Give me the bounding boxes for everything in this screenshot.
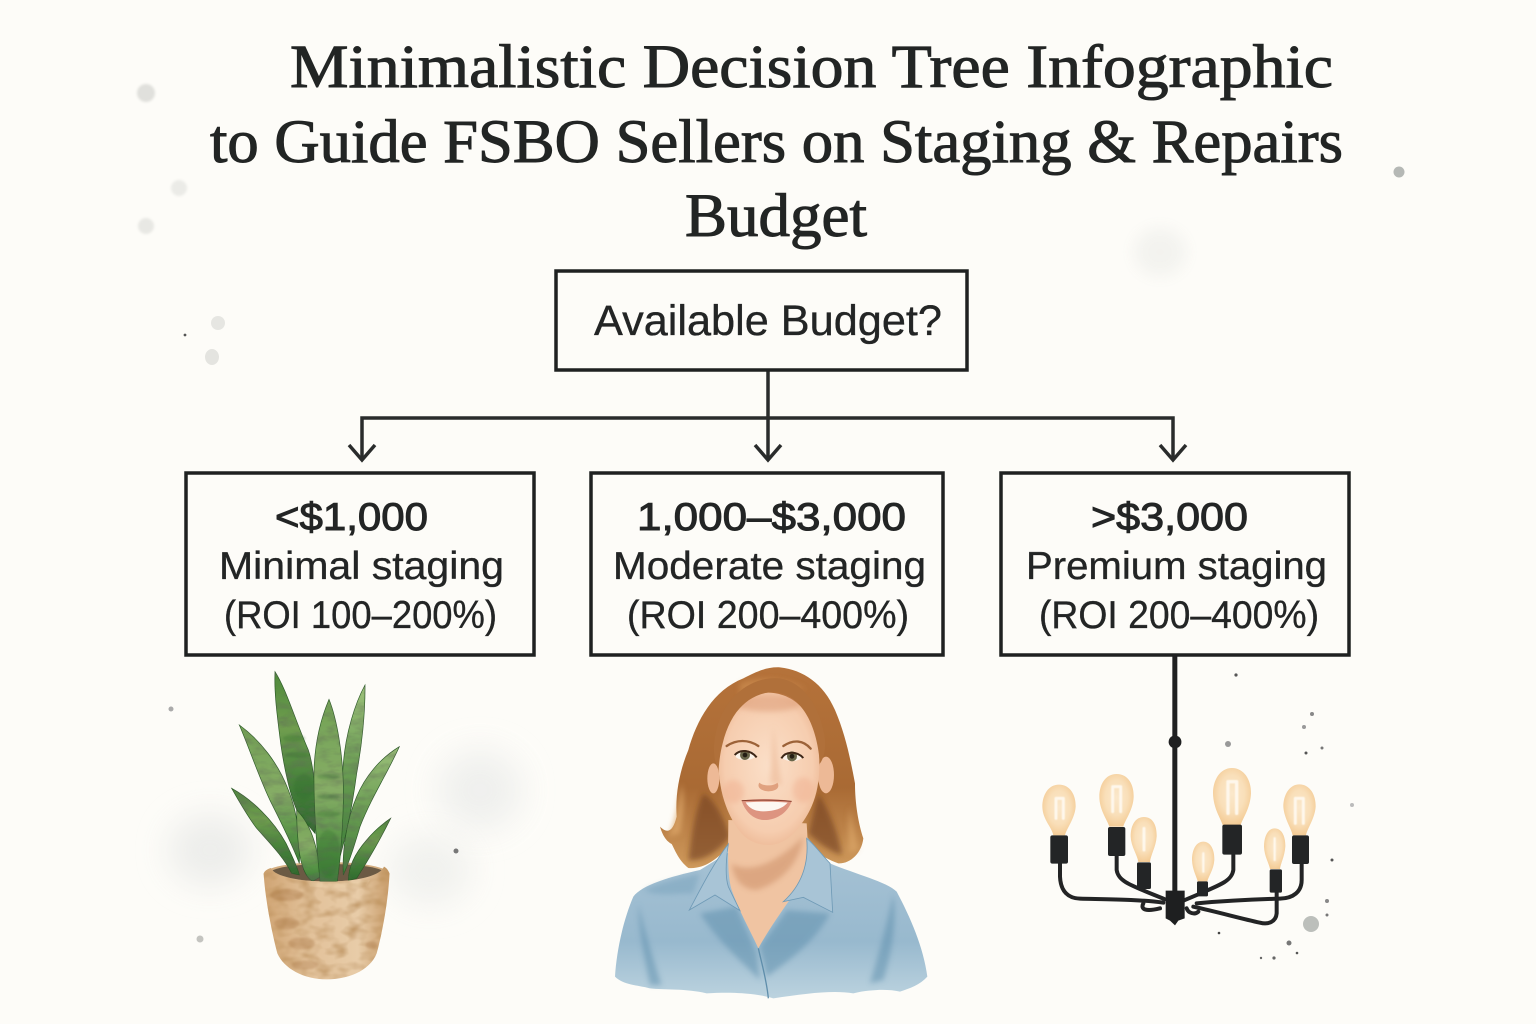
collar	[689, 838, 833, 912]
eyebrows	[727, 741, 811, 749]
connector arrows from root to options	[349, 370, 1186, 460]
leaf bands	[283, 735, 340, 877]
title: Minimalistic Decision Tree Infographic	[290, 34, 1333, 101]
option box: under $1,000: (ROI 100–200%)	[224, 594, 497, 637]
woven basket pot	[264, 867, 389, 979]
title: to Guide FSBO Sellers on Staging & Repairs	[210, 109, 1343, 176]
pot shading	[270, 889, 378, 970]
option box: 1,000 to $3,000: 1,000–$3,000	[637, 496, 906, 539]
option box: over $3,000: >$3,000	[1091, 496, 1248, 539]
nose	[758, 783, 778, 791]
option box: under $1,000: Minimal staging	[219, 545, 504, 588]
root decision box: Available Budget?: Available Budget?	[594, 297, 942, 345]
icon: potted snake plant	[232, 672, 399, 979]
hair	[660, 667, 863, 868]
face shading	[723, 695, 814, 803]
face	[718, 693, 819, 845]
option box: under $1,000	[186, 473, 534, 655]
option box: over $3,000: Premium staging	[1026, 545, 1327, 588]
eyes	[735, 750, 803, 761]
shirt placket	[758, 948, 768, 998]
title: Budget	[685, 183, 867, 250]
option box: over $3,000: (ROI 200–400%)	[1039, 594, 1319, 637]
chandelier hub	[1166, 891, 1185, 925]
bulb filament highlights	[1056, 782, 1303, 872]
icon: black chandelier with warm bulbs	[1042, 655, 1316, 925]
icon: smiling woman portrait	[615, 667, 927, 998]
hair highlights and shadow	[668, 679, 858, 860]
ears	[707, 757, 834, 793]
option box: 1,000 to $3,000	[591, 473, 943, 655]
option box: 1,000 to $3,000: Moderate staging	[613, 545, 926, 588]
plant leaves	[232, 672, 399, 881]
root decision box: Available Budget?	[556, 271, 967, 370]
shirt shadows	[638, 873, 895, 985]
mouth	[742, 799, 792, 820]
neck and open collar	[728, 820, 808, 948]
watercolor background stains	[137, 84, 1404, 960]
option box: 1,000 to $3,000: (ROI 200–400%)	[627, 594, 909, 637]
chandelier arms	[1060, 855, 1302, 923]
front hair	[714, 678, 825, 768]
option box: over $3,000	[1001, 473, 1349, 655]
shirt	[615, 837, 927, 998]
pot back rim and soil	[264, 862, 390, 886]
option box: under $1,000: <$1,000	[275, 496, 428, 539]
bulb sockets	[1050, 825, 1309, 896]
title	[210, 34, 1343, 250]
light bulbs	[1042, 768, 1316, 881]
chandelier stem	[1169, 655, 1181, 892]
